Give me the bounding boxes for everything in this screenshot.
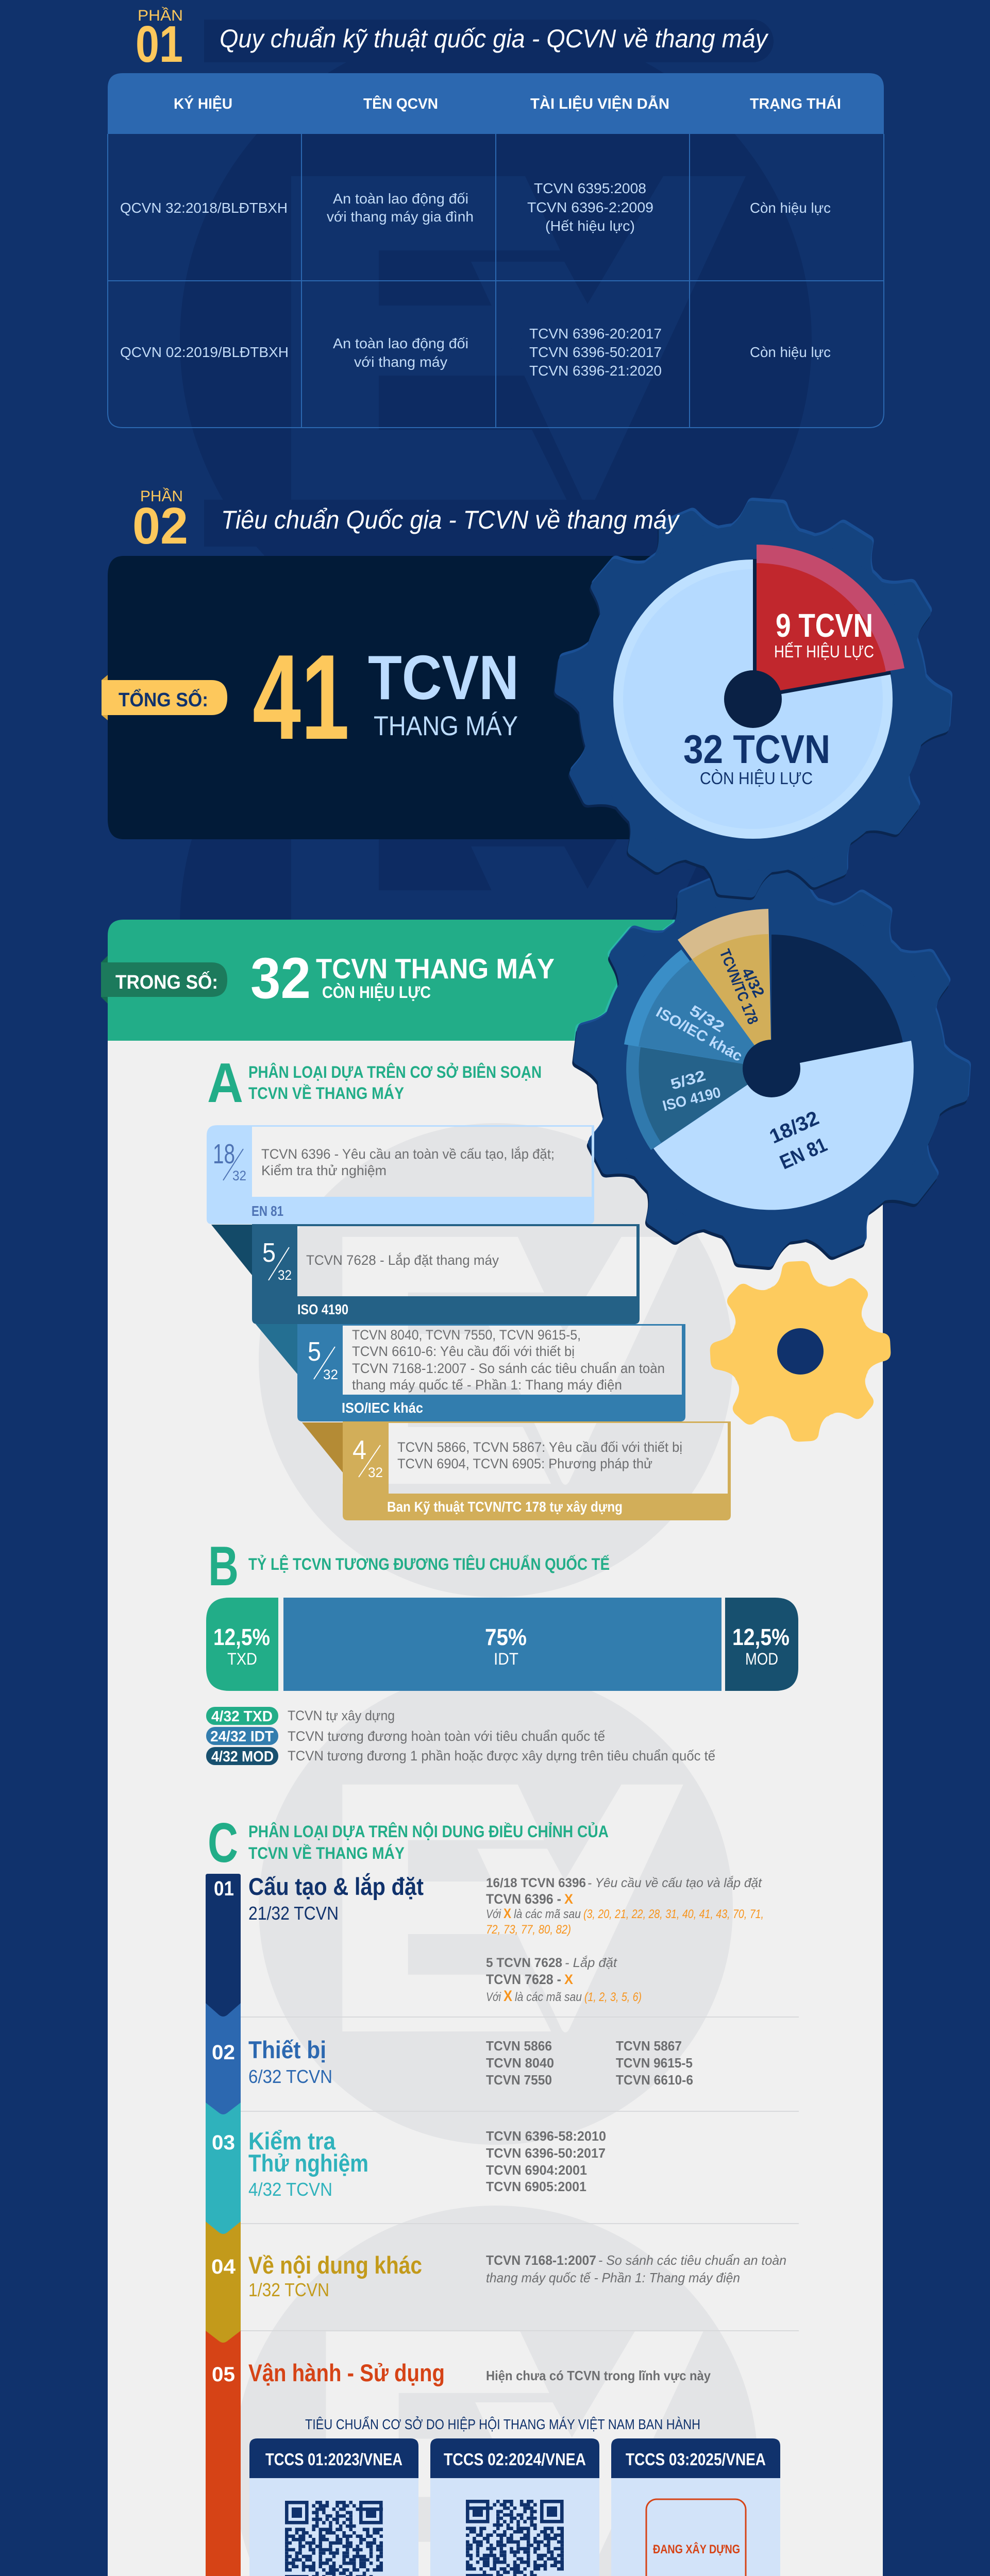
category 03: testing: 03 bbox=[212, 2131, 235, 2154]
category 02: equipment: TCVN 8040 bbox=[486, 2055, 554, 2071]
table: QCVN: An toàn lao động đối bbox=[333, 191, 468, 207]
card: 4/32 TCVN/TC 178: Ban Kỹ thuật TCVN/TC 178 tự xây dựng bbox=[387, 1499, 623, 1515]
category 01: structure and installation: (3, 20, 21, 22, 28, 31, 40, 41, 43, 70, 71, bbox=[583, 1907, 764, 1921]
card: 5/32 ISO 4190: 32 bbox=[278, 1267, 292, 1283]
section 2 heading: Tiêu chuẩn Quốc gia - TCVN về thang máy bbox=[221, 505, 680, 534]
section 2 heading bbox=[132, 487, 680, 555]
timeline stripe bbox=[206, 1874, 241, 2576]
section C heading bbox=[208, 1811, 609, 1874]
table: QCVN: KÝ HIỆU bbox=[174, 95, 232, 112]
stacked bar: TCVN ratio bbox=[206, 1598, 798, 1691]
yellow gear icon bbox=[709, 1260, 892, 1443]
table: QCVN: QCVN 32:2018/BLĐTBXH bbox=[120, 200, 288, 216]
watermark: EV logo second navy area bbox=[180, 609, 812, 1241]
card: 5/32 ISO 4190: TCVN 7628 - Lắp đặt thang máy bbox=[306, 1252, 499, 1268]
gear pie chart: 32 TCVN by source: 5/32 bbox=[686, 1002, 727, 1036]
gear pie chart: 41 TCVN split: CÒN HIỆU LỰC bbox=[700, 769, 813, 788]
table: QCVN: với thang máy bbox=[354, 354, 447, 370]
card: TCCS 01:2023/VNEA bbox=[249, 2438, 418, 2576]
category 03: testing: Thử nghiệm bbox=[248, 2149, 368, 2177]
category 05: operation and use: 05 bbox=[212, 2363, 235, 2386]
category 03: testing: TCVN 6905:2001 bbox=[486, 2179, 586, 2194]
table: QCVN: TCVN 6396-21:2020 bbox=[529, 363, 662, 379]
category 01: structure and installation: 5 TCVN 7628 bbox=[486, 1956, 562, 1970]
card: 5/32 ISO/IEC: ISO/IEC khác bbox=[342, 1400, 423, 1416]
stacked bar: TCVN ratio: 12,5% bbox=[732, 1624, 790, 1650]
category 02: equipment: TCVN 7550 bbox=[486, 2072, 552, 2088]
category 01: structure and installation: (1, 2, 3, 5, 6) bbox=[584, 1990, 642, 2004]
dividers bbox=[241, 2017, 799, 2331]
card: 4/32 TCVN/TC 178: 32 bbox=[368, 1465, 383, 1480]
card: TCCS 03:2025/VNEA: ĐANG XÂY DỰNG bbox=[653, 2542, 740, 2556]
category 02: equipment: 6/32 TCVN bbox=[248, 2066, 332, 2087]
gear pie chart: 32 TCVN by source: ISO/IEC khác bbox=[653, 1004, 745, 1065]
section 1 heading: 01 bbox=[136, 15, 183, 73]
category 03: testing: TCVN 6396-58:2010 bbox=[486, 2128, 606, 2144]
category 01: structure and installation: là các mã sau bbox=[515, 1990, 582, 2004]
category 01: structure and installation: Với bbox=[486, 1907, 501, 1921]
category 04: other content: 1/32 TCVN bbox=[248, 2279, 329, 2300]
table: QCVN: TCVN 6396-50:2017 bbox=[529, 344, 662, 360]
legend: bar categories bbox=[206, 1707, 715, 1765]
category 02: equipment bbox=[212, 2036, 693, 2088]
panel: total 41 TCVN: THANG MÁY bbox=[374, 711, 518, 741]
card: TCCS 02:2024/VNEA bbox=[430, 2438, 599, 2576]
category 01: structure and installation: 01 bbox=[214, 1877, 234, 1900]
card: 4/32 TCVN/TC 178: TCVN 6904, TCVN 6905: Phương pháp thử bbox=[397, 1456, 652, 1471]
category 01: structure and installation: 21/32 TCVN bbox=[248, 1903, 339, 1924]
category 04: other content: 04 bbox=[211, 2256, 236, 2278]
category 01: structure and installation: 16/18 TCVN 6396 bbox=[486, 1876, 586, 1890]
banner: 32 TCVN in force: TCVN THANG MÁY bbox=[316, 953, 555, 985]
banner: 32 TCVN in force: TRONG SỐ: bbox=[115, 970, 218, 993]
section 2 heading: PHẦN bbox=[140, 487, 183, 505]
category 01: structure and installation: Cấu tạo & lắp đặt bbox=[248, 1873, 424, 1900]
section C heading: C bbox=[208, 1811, 238, 1874]
legend: bar categories: 4/32 TXD bbox=[211, 1708, 273, 1725]
legend: bar categories: 4/32 MOD bbox=[211, 1749, 274, 1765]
card: TCCS 03:2025/VNEA bbox=[611, 2438, 780, 2576]
category 04: other content bbox=[211, 2251, 786, 2300]
legend: bar categories: TCVN tương đương 1 phần hoặc được xây dựng trên tiêu chuẩn quốc tế bbox=[288, 1748, 715, 1764]
card: 5/32 ISO/IEC: TCVN 8040, TCVN 7550, TCVN 9615-5, bbox=[352, 1327, 581, 1343]
stacked bar: TCVN ratio: IDT bbox=[494, 1650, 518, 1668]
section B heading bbox=[208, 1535, 610, 1598]
gear pie chart: 41 TCVN split bbox=[551, 496, 954, 902]
category 01: structure and installation: X bbox=[564, 1972, 573, 1987]
card: 18/32 EN 81: 32 bbox=[232, 1168, 246, 1183]
card: 18/32 EN 81 bbox=[207, 1125, 594, 1224]
section 2 heading: 02 bbox=[132, 497, 188, 555]
section A heading: PHÂN LOẠI DỰA TRÊN CƠ SỞ BIÊN SOẠN bbox=[248, 1063, 542, 1081]
table: QCVN bbox=[108, 73, 884, 428]
section B heading: TỶ LỆ TCVN TƯƠNG ĐƯƠNG TIÊU CHUẨN QUỐC TẾ bbox=[248, 1555, 610, 1573]
gear pie chart: 32 TCVN by source bbox=[569, 866, 972, 1272]
category 01: structure and installation: Với bbox=[486, 1990, 501, 2004]
category 01: structure and installation: - Lắp đặt bbox=[565, 1955, 617, 1970]
panel: light content background bbox=[108, 1025, 883, 2576]
category 04: other content: Về nội dung khác bbox=[248, 2251, 422, 2279]
gear pie chart: 41 TCVN split: HẾT HIỆU LỰC bbox=[774, 642, 874, 661]
category 04: other content: - So sánh các tiêu chuẩn an toàn bbox=[598, 2252, 786, 2268]
card: 18/32 EN 81: Kiểm tra thử nghiệm bbox=[261, 1163, 387, 1178]
panel: total 41 TCVN: 41 bbox=[253, 629, 349, 765]
category 02: equipment: TCVN 5867 bbox=[616, 2038, 682, 2054]
heading: association standards: TIÊU CHUẨN CƠ SỞ DO HIỆP HỘI THANG MÁY VIỆT NAM BAN HÀNH bbox=[305, 2416, 700, 2432]
category 03: testing: Kiểm tra bbox=[248, 2127, 336, 2155]
category 01: structure and installation: TCVN 7628 - bbox=[486, 1972, 561, 1987]
table: QCVN: TCVN 6395:2008 bbox=[534, 180, 646, 196]
category 04: other content: TCVN 7168-1:2007 bbox=[486, 2252, 596, 2268]
table: QCVN: TÀI LIỆU VIỆN DẪN bbox=[530, 95, 669, 112]
card: 5/32 ISO 4190 bbox=[211, 1224, 640, 1324]
category 03: testing: TCVN 6396-50:2017 bbox=[486, 2145, 606, 2161]
category 02: equipment: TCVN 6610-6 bbox=[616, 2072, 693, 2088]
card: 5/32 ISO/IEC: TCVN 7168-1:2007 - So sánh các tiêu chuẩn an toàn bbox=[352, 1361, 665, 1376]
category 01: structure and installation: X bbox=[504, 1988, 512, 2005]
card: 5/32 ISO 4190: ISO 4190 bbox=[297, 1301, 348, 1317]
table: QCVN: TRẠNG THÁI bbox=[750, 95, 841, 112]
stacked bar: TCVN ratio: 12,5% bbox=[213, 1624, 270, 1650]
category 05: operation and use bbox=[212, 2359, 711, 2386]
category 03: testing: 4/32 TCVN bbox=[248, 2179, 332, 2200]
table: QCVN: Còn hiệu lực bbox=[750, 344, 831, 360]
gear pie chart: 32 TCVN by source: 5/32 bbox=[669, 1067, 708, 1093]
card: 4/32 TCVN/TC 178 bbox=[302, 1421, 731, 1520]
section 2 heading bar bbox=[204, 500, 719, 547]
section A heading: A bbox=[207, 1052, 243, 1114]
panel: total 41 TCVN: TỔNG SỐ: bbox=[119, 688, 208, 711]
category 05: operation and use: Hiện chưa có TCVN trong lĩnh vực này bbox=[486, 2368, 711, 2383]
category 02: equipment: TCVN 5866 bbox=[486, 2038, 552, 2054]
table: QCVN: với thang máy gia đình bbox=[327, 209, 474, 225]
category 01: structure and installation: 72, 73, 77, 80, 82) bbox=[486, 1923, 571, 1937]
card: TCCS 02:2024/VNEA: TCCS 02:2024/VNEA bbox=[444, 2450, 586, 2469]
category 01: structure and installation: X bbox=[504, 1906, 511, 1921]
table: QCVN: TCVN 6396-20:2017 bbox=[529, 326, 662, 342]
card: 18/32 EN 81: EN 81 bbox=[251, 1203, 283, 1219]
gear pie chart: 32 TCVN by source: 18/32 bbox=[766, 1107, 823, 1148]
banner: 32 TCVN in force: CÒN HIỆU LỰC bbox=[322, 983, 431, 1002]
table: QCVN: TÊN QCVN bbox=[363, 95, 438, 112]
card: 5/32 ISO/IEC: TCVN 6610-6: Yêu cầu đối với thiết bị bbox=[352, 1344, 575, 1359]
category 02: equipment: Thiết bị bbox=[248, 2036, 326, 2063]
gear pie chart: 32 TCVN by source: ISO 4190 bbox=[661, 1084, 723, 1114]
card: TCCS 01:2023/VNEA: TCCS 01:2023/VNEA bbox=[265, 2450, 402, 2469]
banner: 32 TCVN in force bbox=[101, 920, 721, 1041]
section B heading: B bbox=[208, 1535, 239, 1598]
table: QCVN: (Hết hiệu lực) bbox=[545, 218, 635, 234]
card: 5/32 ISO/IEC bbox=[256, 1324, 685, 1421]
section C heading: PHÂN LOẠI DỰA TRÊN NỘI DUNG ĐIỀU CHỈNH CỦA bbox=[248, 1822, 609, 1841]
table: QCVN: Còn hiệu lực bbox=[750, 200, 831, 216]
banner: 32 TCVN in force: 32 bbox=[250, 946, 311, 1010]
card: 18/32 EN 81: TCVN 6396 - Yêu cầu an toàn về cấu tạo, lắp đặt; bbox=[261, 1146, 555, 1162]
gear pie chart: 32 TCVN by source: 4/32 bbox=[738, 965, 767, 1000]
section 1 heading: Quy chuẩn kỹ thuật quốc gia - QCVN về thang máy bbox=[220, 24, 769, 53]
category 01: structure and installation: TCVN 6396 - bbox=[486, 1891, 561, 1907]
legend: bar categories: TCVN tự xây dựng bbox=[288, 1708, 395, 1723]
category 03: testing bbox=[212, 2127, 606, 2200]
category 01: structure and installation: X bbox=[564, 1891, 573, 1907]
card: 5/32 ISO/IEC: 5 bbox=[308, 1337, 321, 1367]
gear pie chart: 32 TCVN by source: EN 81 bbox=[777, 1133, 830, 1174]
section C heading: TCVN VỀ THANG MÁY bbox=[248, 1844, 405, 1862]
table: QCVN: QCVN 02:2019/BLĐTBXH bbox=[120, 344, 289, 360]
section A heading: TCVN VỀ THANG MÁY bbox=[248, 1084, 404, 1103]
card: 5/32 ISO 4190: 5 bbox=[262, 1238, 276, 1268]
gear pie chart: 32 TCVN by source: TCVN/TC 178 bbox=[716, 947, 761, 1027]
panel: total 41 TCVN bbox=[102, 556, 665, 839]
category 02: equipment: TCVN 9615-5 bbox=[616, 2055, 693, 2071]
stacked bar: TCVN ratio: MOD bbox=[745, 1650, 778, 1668]
card: 18/32 EN 81: 18 bbox=[213, 1139, 235, 1170]
stacked bar: TCVN ratio: 75% bbox=[485, 1624, 527, 1650]
table: QCVN: TCVN 6396-2:2009 bbox=[527, 199, 653, 215]
gear pie chart: 41 TCVN split: 32 TCVN bbox=[683, 726, 830, 772]
legend: bar categories: TCVN tương đương hoàn toàn với tiêu chuẩn quốc tế bbox=[288, 1728, 605, 1744]
category 04: other content: thang máy quốc tế - Phần 1: Thang máy điện bbox=[486, 2270, 740, 2285]
card: TCCS 03:2025/VNEA: TCCS 03:2025/VNEA bbox=[626, 2450, 766, 2469]
gear pie chart: 41 TCVN split: 9 TCVN bbox=[776, 607, 873, 644]
category 02: equipment: 02 bbox=[212, 2041, 235, 2064]
category 03: testing: TCVN 6904:2001 bbox=[486, 2162, 587, 2178]
section 1 heading: PHẦN bbox=[138, 7, 183, 24]
category 01: structure and installation: là các mã sau bbox=[514, 1907, 581, 1921]
card: 5/32 ISO/IEC: thang máy quốc tế - Phần 1: Thang máy điện bbox=[352, 1377, 622, 1393]
legend: bar categories: 24/32 IDT bbox=[210, 1728, 274, 1745]
panel: total 41 TCVN: TCVN bbox=[368, 642, 519, 713]
category 05: operation and use: Vận hành - Sử dụng bbox=[248, 2359, 445, 2386]
section A heading bbox=[207, 1052, 542, 1114]
card: 4/32 TCVN/TC 178: TCVN 5866, TCVN 5867: Yêu cầu đối với thiết bị bbox=[397, 1439, 682, 1455]
category 01: structure and installation bbox=[214, 1873, 764, 2005]
table: QCVN: An toàn lao động đối bbox=[333, 335, 468, 351]
category 01: structure and installation: - Yêu cầu về cấu tạo và lắp đặt bbox=[588, 1875, 762, 1890]
card: 5/32 ISO/IEC: 32 bbox=[323, 1367, 338, 1382]
watermark: EV logo upper navy area bbox=[180, 25, 812, 656]
section 1 heading bbox=[136, 7, 774, 73]
card: 4/32 TCVN/TC 178: 4 bbox=[353, 1435, 366, 1465]
stacked bar: TCVN ratio: TXD bbox=[227, 1650, 257, 1668]
